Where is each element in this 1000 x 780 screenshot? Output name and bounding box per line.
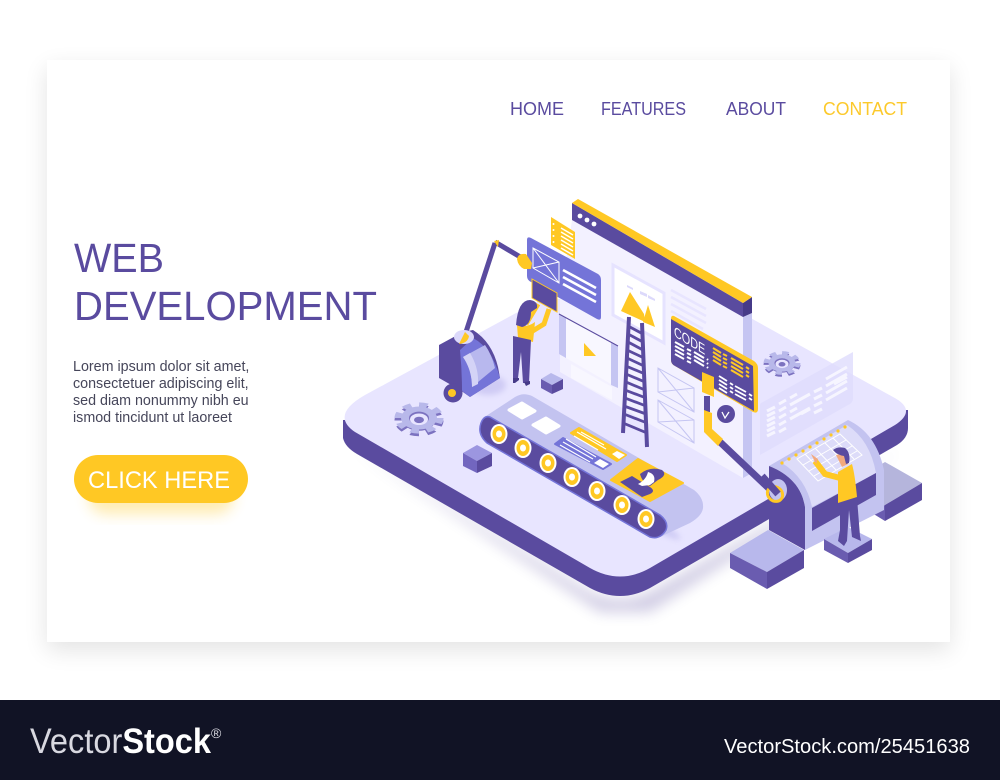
- footer bar: [0, 700, 1000, 780]
- man figure: [811, 447, 861, 546]
- window text lines: [671, 290, 706, 329]
- body text: sed diam nonummy nibh eu: [73, 393, 249, 409]
- yellow tag: [571, 428, 626, 461]
- navigation menu: FEATURES: [601, 99, 686, 119]
- title: DEVELOPMENT: [74, 283, 377, 329]
- registered mark: ®: [211, 725, 222, 741]
- navigation menu: [510, 99, 907, 119]
- wireframes on window: [658, 368, 694, 443]
- cube left: [463, 445, 492, 473]
- gear right: [767, 353, 797, 375]
- rear screen panel: [559, 314, 618, 400]
- blue tag: [555, 438, 611, 469]
- navigation menu: HOME: [510, 99, 564, 119]
- crane base: [439, 330, 506, 402]
- call to action button: [74, 455, 248, 514]
- front left box: [730, 530, 804, 589]
- title: WEB: [74, 235, 164, 281]
- dark square card: [532, 279, 557, 312]
- image card with mountains: [613, 265, 664, 343]
- body text: Lorem ipsum dolor sit amet,: [73, 359, 249, 375]
- call to action button: CLICK HERE: [88, 467, 230, 494]
- body text: ismod tincidunt ut laoreet: [73, 410, 232, 426]
- conveyor belt: [480, 394, 703, 547]
- body text: consectetuer adipiscing elit,: [73, 376, 249, 392]
- gear left: [399, 405, 439, 433]
- cube centre: [541, 373, 563, 394]
- isometric platform: [343, 290, 908, 612]
- footer logo: VectorStock: [30, 722, 211, 761]
- white tiles: [509, 403, 559, 433]
- crane arm: [465, 240, 522, 335]
- navigation menu: CONTACT: [823, 99, 907, 119]
- back right box: [872, 462, 922, 521]
- landing page card: [47, 60, 950, 650]
- yellow document: [551, 217, 575, 259]
- robotic arm: [702, 372, 778, 497]
- code panel: CODE: [674, 323, 705, 358]
- avatar card: [611, 459, 683, 501]
- translucent code panel: [760, 352, 853, 455]
- ladder: [623, 317, 647, 447]
- printer machine: [762, 420, 884, 550]
- footer url: VectorStock.com/25451638: [724, 736, 970, 758]
- crane holder: [517, 254, 532, 269]
- navigation menu: ABOUT: [726, 99, 786, 119]
- code panel: [671, 316, 758, 413]
- check badge: [717, 405, 735, 423]
- browser window: [560, 199, 752, 478]
- blue wireframe panel: [527, 237, 601, 320]
- woman figure: [513, 300, 549, 386]
- step box: [824, 527, 872, 563]
